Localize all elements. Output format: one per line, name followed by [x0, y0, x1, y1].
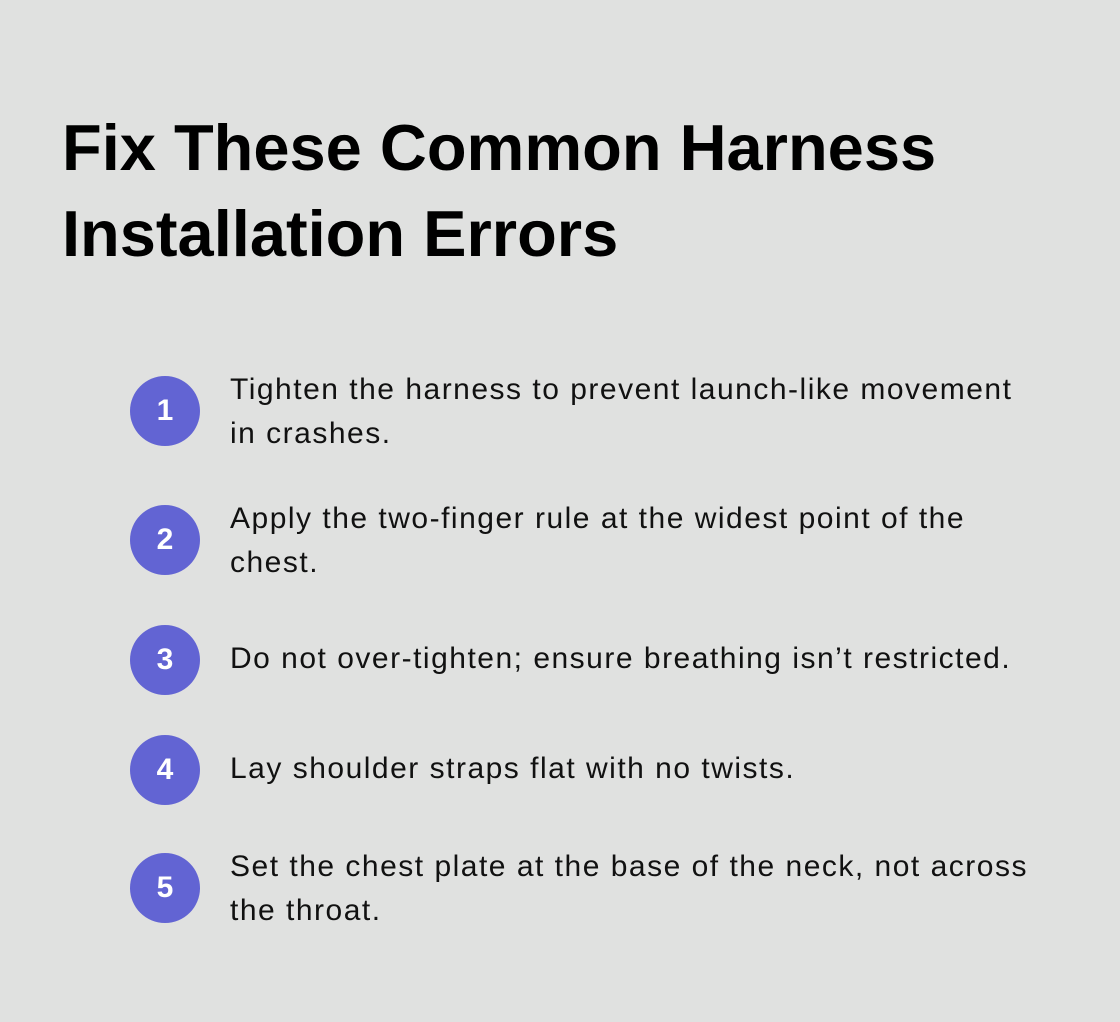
- badge 3: [130, 625, 200, 695]
- text 4: Lay shoulder straps flat with no twists.: [230, 752, 795, 785]
- item 4: [130, 735, 795, 805]
- badge 3: 3: [157, 643, 173, 676]
- text 1: Tighten the harness to prevent launch-like movement in crashes.: [230, 373, 1012, 450]
- title: Fix These Common Harness: [62, 111, 936, 184]
- badge 1: [130, 376, 200, 446]
- badge 4: 4: [157, 753, 173, 786]
- badge 2: 2: [157, 523, 173, 556]
- badge 2: [130, 505, 200, 575]
- title: [62, 111, 936, 270]
- badge 5: 5: [157, 871, 173, 904]
- item 1: [130, 373, 1012, 450]
- text 5: Set the chest plate at the base of the neck, not across the throat.: [230, 850, 1028, 927]
- item 5: [130, 850, 1028, 927]
- item 3: [130, 625, 1011, 695]
- title: Installation Errors: [62, 197, 618, 270]
- text 2: Apply the two-finger rule at the widest point of the chest.: [230, 502, 965, 579]
- badge 4: [130, 735, 200, 805]
- badge 1: 1: [157, 394, 173, 427]
- item 2: [130, 502, 965, 579]
- badge 5: [130, 853, 200, 923]
- text 3: Do not over-tighten; ensure breathing isn’t restricted.: [230, 642, 1011, 675]
